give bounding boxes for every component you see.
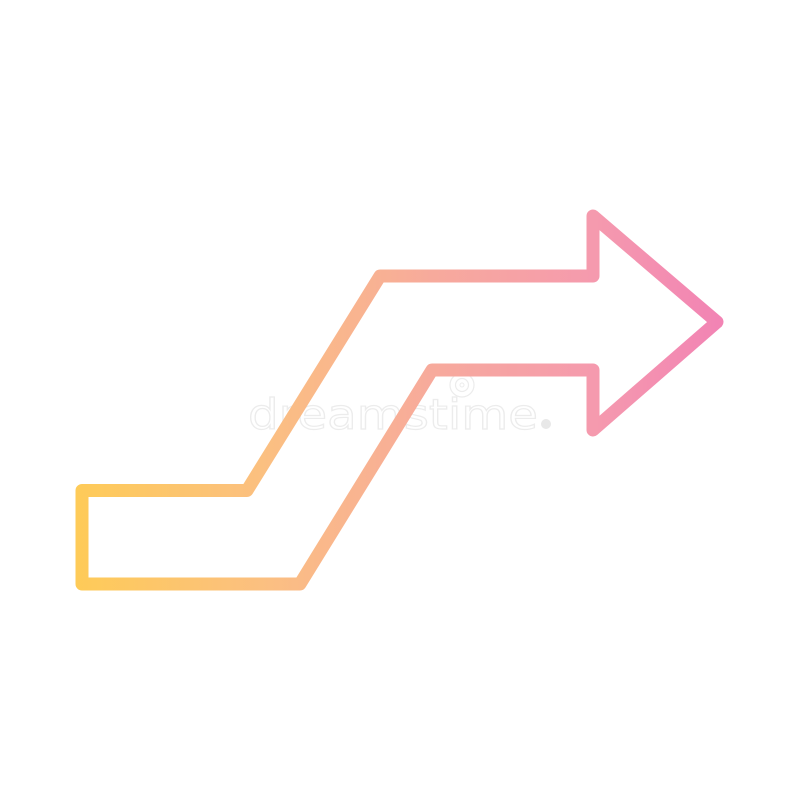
watermark: dreamstime (248, 373, 551, 439)
watermark: dreamstime: dreamstime (248, 390, 538, 439)
icon: zigzag outlined arrow pointing right (82, 216, 717, 584)
